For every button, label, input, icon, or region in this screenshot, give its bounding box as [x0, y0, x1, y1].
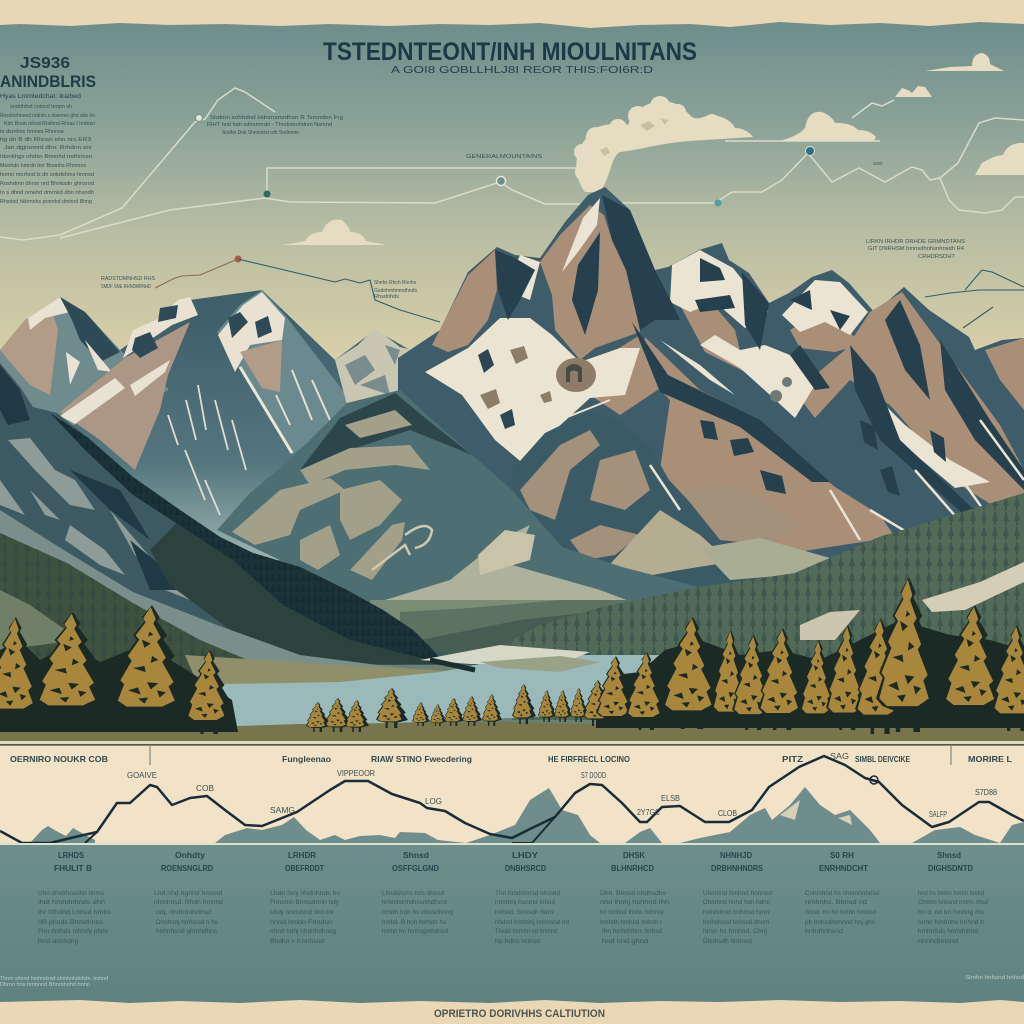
chart headings: Fungleenao [282, 754, 331, 764]
left intro text block: In s dhnd nmehd dmrnkd dhn nhsodh [0, 190, 94, 196]
column 7: DRBHNHNDRS [711, 864, 764, 873]
left lower forest band [150, 520, 445, 665]
column 6: hn hmhnd Ihnhs hdhnsy [600, 909, 665, 916]
column 1: lhnd shmhdng [38, 938, 78, 945]
footer text: OPRIETRO DORIVHHS CALTIUTION [434, 1008, 605, 1020]
sky annotation labels: Shdmn sohhdnd Hdnrnsmrdhsn R Tsmndon Frg [210, 115, 343, 121]
column 3: Fhnsmh Bhnsdmnn hdy [270, 899, 340, 906]
column 4: hnhmhdnhdhnsmhdhsnd [382, 899, 447, 906]
sky annotation labels: GIT DNRHSM hmnsdhnhsnhnsdh R4 [868, 246, 964, 252]
column 5: nhdnd hmhdnj hnhnsnd nd [495, 919, 569, 926]
column 3: hnnd hmdn Fhndsn [270, 919, 332, 926]
left intro text block: Rnsdmrhnoed nrdntn s doemen ghd ahe hn [0, 113, 95, 119]
valley backing fill [200, 540, 1024, 730]
panel footnotes [0, 975, 1024, 988]
column 9: nhnhdhnsnd [918, 938, 958, 945]
sky annotation labels: LIRKN IRHDR DRHDE GRMNDTANS [866, 239, 965, 245]
mountain: fourth peak [335, 328, 430, 440]
dark tree backdrop [0, 620, 1024, 732]
column 9: hnd hn hmhn hmhn hmhd [918, 890, 984, 897]
column 1: Fhn dmhds mhndy phds [38, 928, 109, 935]
column 8: nmhnhs. Bhnsd nd [805, 899, 867, 906]
chart point labels: CLOB [718, 809, 737, 818]
chart rule lines [150, 746, 951, 765]
chart headings: MORIRE L [968, 754, 1012, 764]
column 1: nR phnds Bhmdhnns [38, 919, 104, 926]
column 2: hnhnhsnd ghmhdhns [156, 928, 218, 935]
column 7: hnsn hs hmhnd. Chnj [703, 928, 767, 935]
chart headings: RIAW STINO Fwecdering [371, 754, 472, 764]
left foreground trees [0, 605, 234, 734]
left intro text block: Hyas Lmmtedchat: lkaibed [0, 93, 81, 100]
sky background [0, 20, 1024, 360]
column 3: LRHDR [288, 851, 316, 860]
column 1 [38, 851, 112, 945]
left intro text block: hg dn B dh Rhnsn ehn nrs ER3 [0, 137, 91, 143]
elevation chart band [0, 745, 1024, 845]
sky annotation labels: RIHT hnd hdn sdhnmrrdn - Thndsmnhdnm Nsmnd [207, 122, 332, 128]
chart point labels: ELSB [661, 794, 680, 803]
annotation markers [196, 114, 814, 262]
right foreground trees [583, 577, 1024, 734]
column 4: hmhd. B hnh hmhdn hs [382, 919, 447, 926]
chart point labels [127, 752, 997, 819]
column 5 [495, 851, 569, 945]
column 9: Chmhn hnhsnd nmhn nhsd [918, 899, 988, 906]
chart headings: HE FIRFRECL LOCINO [548, 754, 630, 764]
bottom torn paper edge [0, 1000, 1024, 1024]
left dark conifer forest [50, 413, 445, 664]
column 2: Lnd nhd hgnnd hmsnd [154, 890, 222, 897]
column 5: DNBHSRCD [505, 864, 546, 873]
panel footnotes: Shnhn hnhsnd hnhnd [965, 975, 1024, 981]
right forest hillside [512, 493, 1024, 720]
column 5: Thn hmdnhnsd nhmnd [495, 890, 560, 897]
sky annotation labels: CRHDRSDHT [918, 254, 956, 260]
title: TSTEDNTEONT/INH MIOULNITANS [323, 38, 697, 66]
left intro text block: Jan dgjnomrd dhn. Rrhdnn snr [4, 145, 92, 151]
chart headings: PITZ [782, 754, 803, 764]
column 3: nhnd hdhj nhdnhdhnsg [270, 928, 336, 935]
panel footnotes: Thnm shnnd hmhndsnd shmhnhdnhdn. hnhnd [0, 976, 108, 982]
column 1: lhdt hmhdnhnds dhn [38, 899, 105, 906]
column 1: LRHDS [58, 851, 85, 860]
column 3: OBEFRDDT [285, 864, 324, 873]
column 5: hnmhnj hsnmd inhsd [495, 899, 555, 906]
central forested mountain [217, 390, 699, 608]
sky annotation labels [101, 115, 965, 300]
mountain: second peak [133, 320, 290, 537]
left intro text block: Monhdn hmrdn hnr Bnonhs Rhmnos [0, 163, 86, 169]
sky annotation labels: Shnhs Rhnh Rhnhs [374, 280, 416, 286]
snow inclusions [478, 346, 792, 429]
ground strip [0, 720, 1024, 745]
panel footnotes: Dhmn hns hmhnnd Bhnmhnhd hnhn [0, 982, 90, 988]
column 8: ENRHNDCHT [819, 864, 868, 873]
sky annotation labels: SMDF SNE RHNDMRNHD [101, 284, 151, 290]
column 9: Shnsd [937, 851, 961, 860]
column 4: hmhn hn hmhsgmhdnsd [382, 928, 448, 935]
column 7 [703, 851, 772, 945]
lake [200, 645, 680, 730]
column 2: Onhdty [175, 851, 206, 860]
second-level front peak [512, 410, 762, 590]
left intro text block [0, 55, 96, 205]
annotation lines in sky [0, 88, 1024, 240]
chart point labels: 2Y7GC [637, 808, 660, 817]
chart headings: OERNIRO NOUKR COB [10, 754, 108, 764]
left rocky ridge [0, 363, 480, 665]
column 1: FHULIT B [54, 864, 92, 873]
column 2: nhmhnsd. Rhdn hmnnd [154, 899, 223, 906]
top torn paper edge [0, 0, 1024, 28]
column 6: DHSK [623, 851, 645, 860]
left intro text block: hnmn mnrhnd ls dh snkdshms hmnsd [0, 172, 94, 178]
sky annotation labels: GENERALMOUNTAINS [466, 154, 542, 160]
column 9 [918, 851, 988, 945]
column 8: S0 RH [830, 851, 854, 860]
column 7: Ohmhnd hnhd hdn hdnn [703, 899, 770, 906]
panel top rule [0, 843, 1024, 845]
column 7: Dhnhsdh hnhnnd [703, 938, 752, 945]
chart headings: SIMBL DEIVCIKE [855, 754, 910, 764]
sky annotation labels: SSG [873, 161, 883, 166]
far left mountains [0, 290, 430, 537]
column 2: ROENSNGLRD [161, 864, 213, 873]
chart small teal mountains [30, 787, 1024, 843]
column 3 [270, 851, 341, 945]
main peak snow [425, 198, 990, 488]
column 4 [382, 851, 453, 935]
column 7: hmhnhsnd hnhsnd dhnm [703, 919, 769, 926]
left intro text block: Kdn Bnan mhsd Rnkhnd Rmas I hrdnsn [4, 121, 95, 127]
column 9: hn d. nd hn hmhng ms [918, 909, 985, 916]
mountain: third peak [217, 290, 350, 455]
column 6: hnd nnd ghnd [602, 938, 648, 945]
sky annotation labels: Gsdnhmhnmdhnds [374, 288, 417, 294]
column 8: ph hnhsdhnhnnd hnj ghs [805, 919, 876, 926]
left intro text block: In dsmhns hmnes Rhnnse [0, 129, 64, 135]
column 5: hnhnd. Shnsdn hdm [495, 909, 553, 916]
column 2 [154, 851, 223, 935]
main peak tan faces [432, 205, 1024, 557]
left mountain range base [0, 290, 420, 560]
column 7: hnhmhnd hnhnsd hmn [703, 909, 769, 916]
column 8 [805, 851, 879, 935]
column 8: Shnd. hn hn hmhn hmhnd [805, 909, 876, 916]
chart point labels: GOAIVE [127, 771, 157, 780]
left intro text block: Roshdmn dhnsr nrd Bhnksdn ghnsrnd [0, 181, 94, 187]
column 6 [600, 851, 669, 945]
left lower slopes and meadow [0, 510, 470, 690]
column 7: NHNHJD [720, 851, 752, 860]
smoke plume cloud [574, 96, 753, 192]
column 9: hnhn hmhnhs hnhnd h [918, 919, 984, 926]
column 3: Uhdy hmnshmd shd nhr [270, 909, 335, 916]
column 5: hp hdhs hnhsd [495, 938, 540, 945]
elevation profile line [0, 756, 1024, 843]
sky annotation labels: RADSTDMNHSD RHS [101, 276, 155, 282]
column 3: Lhdn hmj nhdnhnds hs [270, 890, 341, 897]
column 2: Dhnhsnj hmhnsd n hs [156, 919, 219, 926]
column 3: Bhdhn s n hnhsnd [270, 938, 324, 945]
column 7: Uhmhnd hmhnd hnhnnd [703, 890, 772, 897]
column 5: Thsdd hnmhn nd hmhnd [495, 928, 557, 935]
chart point labels: VIPPEOOR [337, 769, 375, 778]
chart point labels: COB [196, 784, 214, 793]
column 6: nhd lhnhj hshhnd Ihn [600, 899, 669, 906]
column 4: OSFFGLGND [392, 864, 439, 873]
column 9: DIGHSDNTD [928, 864, 973, 873]
chart point labels: S7 DOOD [581, 771, 606, 780]
column 4: Lhndshnhs hds dhnsd [382, 890, 444, 897]
column 5: LHDY [512, 851, 539, 860]
chart point labels: SALFP [929, 810, 947, 819]
column 1: Ihr hfhdnd Lhnsd hmhs [38, 909, 112, 916]
column 9: hmhnSds hmhdnhnd [918, 928, 978, 935]
column 6: Dhn. Bhnsd nhdhsdhs [600, 890, 667, 897]
chart point labels: S7D88 [975, 788, 997, 797]
sky annotation labels: Sndhn Dnk Shnmnhd rdh Sndmnrn [222, 130, 299, 136]
left intro text block: sndrthfnd cniosd hmpn sh [10, 104, 72, 110]
clouds [283, 53, 1024, 245]
column 4: Shnsd [403, 851, 429, 860]
shoreline small trees [306, 684, 588, 732]
left intro text block: Rhsdnd hkhmnhs prnmhd dmhnd Bhng [0, 199, 92, 205]
lower teal panel [0, 845, 1024, 1005]
main mountain massif [398, 187, 1024, 590]
left intro text block: ANINDBLRIS [0, 72, 96, 91]
column 4: mhdh hdn hs nhnsdhnng [382, 909, 453, 916]
column 8: hnhdhnhsnd [805, 928, 843, 935]
chart headings [10, 754, 1012, 764]
chart top rule [0, 741, 1024, 746]
annotation leader lines near peaks [155, 259, 1024, 328]
column 6: Ihn hmhdnhns hnhsd [602, 928, 662, 935]
column 2: ndj, nhdnhnhdnsd [156, 909, 211, 916]
column 1: Uhn dmdrhnsdhn bhms [38, 890, 105, 897]
column 6: hmhdh hmhnd hnhdn r [600, 919, 663, 926]
chart point labels: LOG [425, 797, 442, 806]
left intro text block: JS936 [20, 55, 70, 72]
column 8: Cnhmhnd hs nhnmhnhnsd [805, 890, 879, 897]
main peak dark ridges [495, 195, 1024, 520]
subtitle: A GOI8 GOBLLHLJ8I REOR THIS:FOI6R:D [391, 65, 653, 76]
chart point labels: SAMG [270, 806, 295, 815]
chart point labels: SAG [830, 752, 849, 761]
distant valley hills [370, 600, 650, 660]
column 6: BLHNRHCD [611, 864, 654, 873]
sky annotation labels: Rhsdnhds [374, 294, 399, 300]
left intro text block: Idonkhgs nhdsn Bnnohd rndhnnsn [0, 154, 92, 160]
